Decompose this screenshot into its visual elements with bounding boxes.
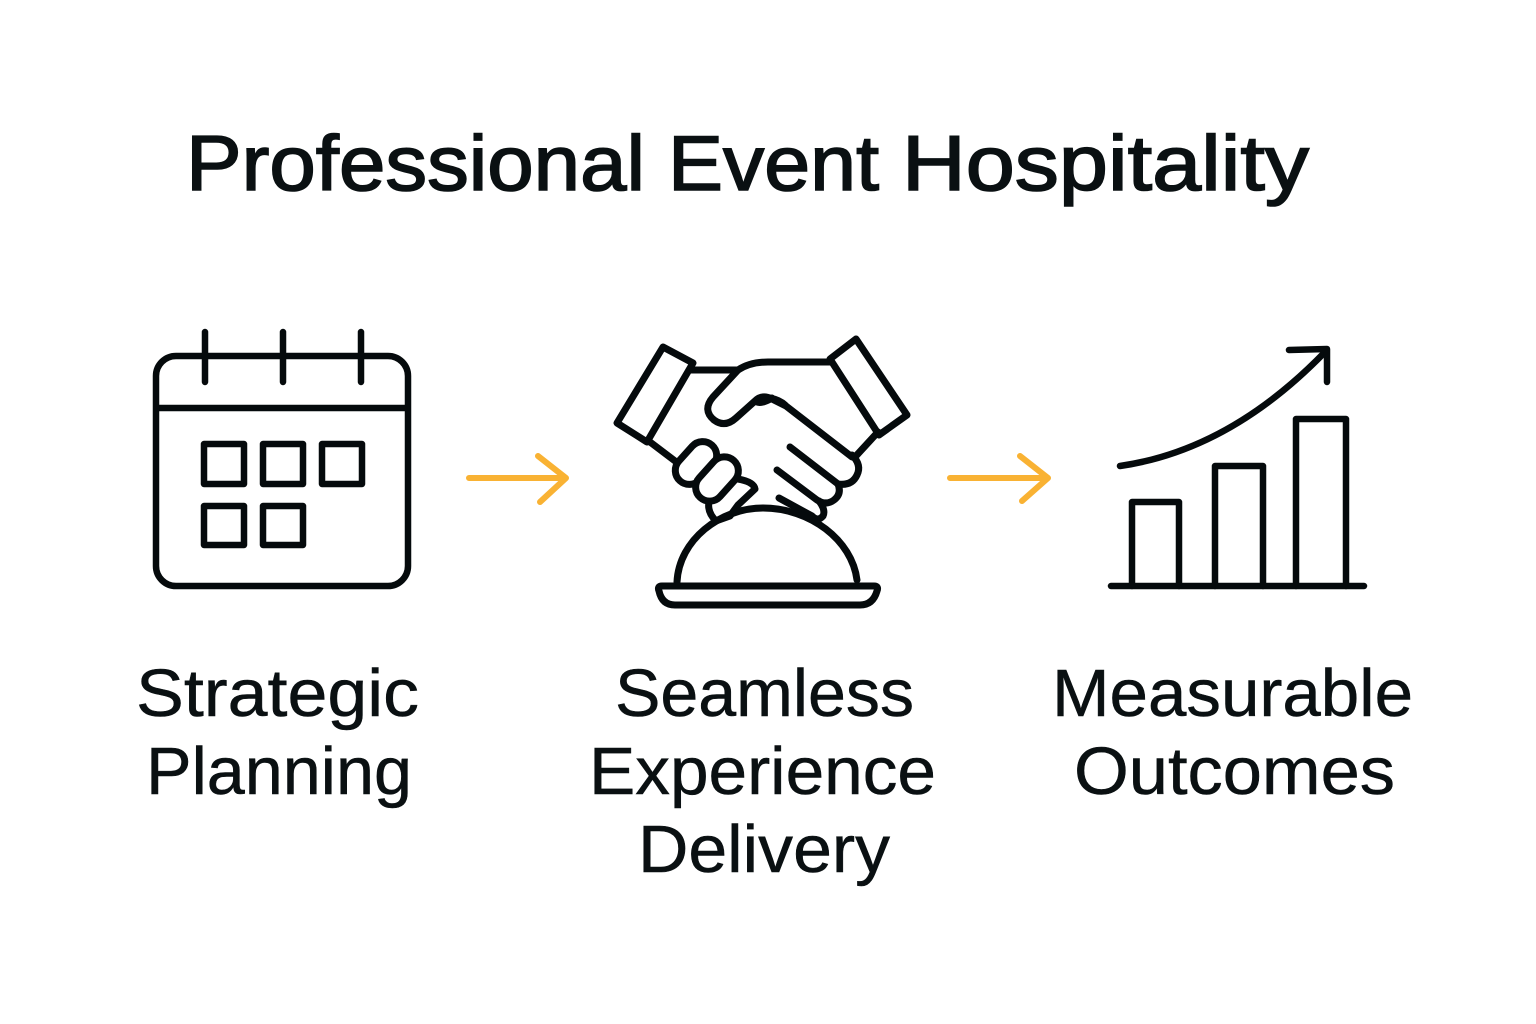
label: seamless experience delivery: Experience xyxy=(589,734,936,809)
arrow: planning to experience xyxy=(469,456,566,502)
title: Hospitality xyxy=(902,119,1309,207)
label: strategic planning xyxy=(136,656,419,809)
label: seamless experience delivery xyxy=(589,656,936,887)
icon: rising bar chart xyxy=(1111,349,1364,586)
title xyxy=(186,119,1309,207)
label: measurable outcomes xyxy=(1052,656,1413,809)
icon: calendar xyxy=(156,332,408,586)
panel: strategic planning xyxy=(136,332,419,809)
label: seamless experience delivery: Delivery xyxy=(638,812,891,887)
title: Professional xyxy=(186,119,645,207)
label: seamless experience delivery: Seamless xyxy=(615,656,914,731)
arrow: experience to outcomes xyxy=(950,456,1048,501)
panel: seamless experience delivery xyxy=(589,339,936,887)
label: measurable outcomes: Measurable xyxy=(1052,656,1413,731)
icon: handshake over cloche xyxy=(617,339,907,605)
label: measurable outcomes: Outcomes xyxy=(1074,734,1395,809)
title: Event xyxy=(668,119,879,207)
panel: measurable outcomes xyxy=(1052,349,1413,809)
label: strategic planning: Planning xyxy=(146,734,412,809)
label: strategic planning: Strategic xyxy=(136,656,419,731)
